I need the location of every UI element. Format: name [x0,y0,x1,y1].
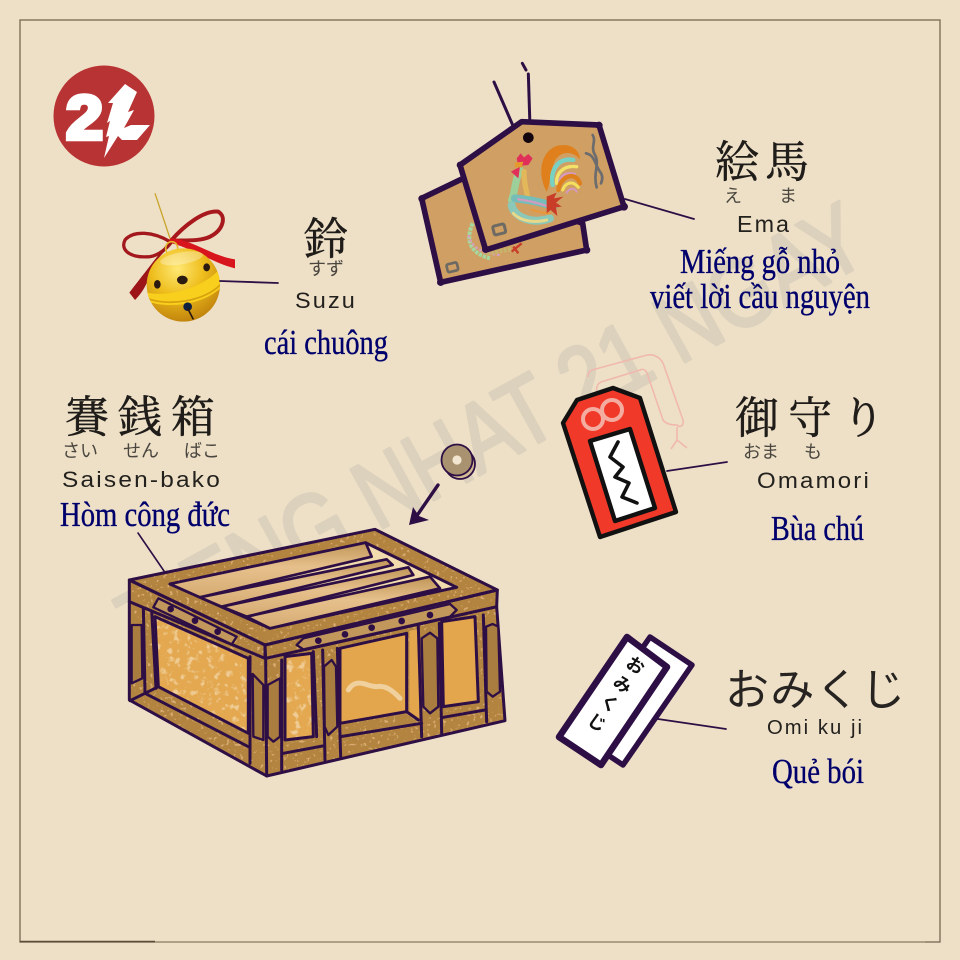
panel: omamori [563,388,885,548]
furigana: omamori: おま [743,442,779,462]
logo: 21 badge: 2 [66,84,103,153]
panel: saisen-bako [60,393,505,776]
icon: omamori charm [563,388,676,537]
panel: ema [418,63,870,316]
slats [170,543,440,628]
furigana: omamori: も [804,442,822,462]
caption: ema meaning [650,243,870,316]
leader line: omamori [667,462,727,471]
furigana: saisen-bako: さい [62,441,98,461]
romaji: Omamori: Omamori [757,468,871,493]
box body fill [129,602,505,776]
heading: suzu kanji: 鈴 [304,215,348,264]
back rooster fragment [468,223,522,258]
icon: coin [442,444,475,479]
box outlines [129,602,505,776]
romaji: Saisen-bako: Saisen-bako [62,467,222,492]
icon: ema plaques [418,63,628,286]
metal strip left [153,598,237,644]
romaji: Suzu: Suzu [295,288,357,313]
arrow: coin into box [409,485,438,525]
rim outline [129,529,497,658]
furigana: saisen-bako: せん [123,441,159,461]
post chevrons [132,624,500,742]
heading: omamori kanji: 御守り [735,394,885,443]
leader line: omikuji [658,719,726,729]
caption: ema meaning: viết lời cầu nguyện [650,278,870,316]
romaji: Ema: Ema [737,211,791,237]
caption: omikuji meaning: Quẻ bói [772,753,864,791]
opening [170,543,457,628]
front wood panel [285,653,313,740]
furigana: ema [724,186,797,206]
furigana: omamori [743,442,822,462]
top rim fill [129,529,497,658]
caption: suzu meaning: cái chuông [264,324,388,362]
icon: omikuji slips [559,637,692,765]
panel scratches [348,683,400,698]
romaji: Omi ku ji: Omi ku ji [767,717,864,739]
panel: suzu [124,193,388,362]
furigana: saisen-bako: ばこ [184,441,220,461]
caption: saisen-bako meaning: Hòm công đức [60,496,230,534]
leader line: saisen-bako [138,533,164,571]
icon: rooster [511,145,580,221]
metal strip right [297,604,457,649]
furigana: ema: ま [779,186,797,206]
left wood panel [155,617,248,733]
heading: ema kanji: 絵馬 [715,138,809,187]
furigana: saisen-bako [62,441,220,461]
leader line: ema [625,199,694,219]
panel: omikuji [559,637,905,791]
icon: jingle bell [124,193,235,322]
icon: omikuji slips: おみくじ [580,651,648,739]
caption: ema meaning: Miếng gỗ nhỏ [680,243,840,281]
leader line: suzu [220,281,278,283]
heading: omikuji kana: おみくじ [725,666,905,715]
icon: lightning one [104,84,150,158]
caption: omamori meaning: Bùa chú [771,510,864,548]
watermark logo: pink outline [588,355,687,449]
furigana: suzu: すず [308,259,344,279]
strip rivets [167,606,433,644]
furigana: ema: え [724,186,742,206]
logo: 21 badge [54,66,154,166]
illustration: offering box [129,529,505,776]
heading: saisen-bako kanji: 賽銭箱 [65,393,215,442]
plain wood panels [340,617,478,723]
